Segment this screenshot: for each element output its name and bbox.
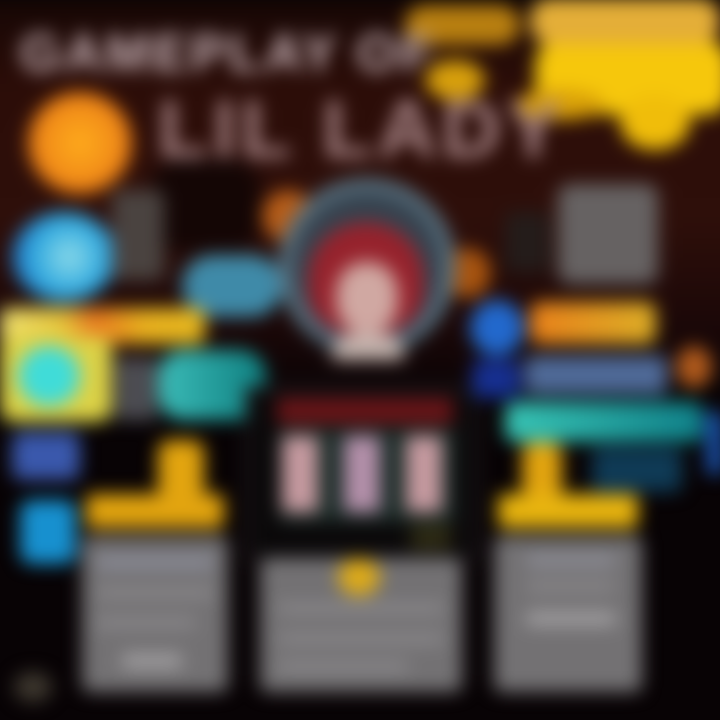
right banner <box>530 302 656 344</box>
reel two <box>344 436 380 512</box>
card: centre <box>260 558 462 692</box>
reel one <box>282 436 318 512</box>
reel three <box>406 436 442 512</box>
gold splash point <box>620 95 690 150</box>
card text <box>526 556 616 565</box>
icon: sun coin <box>28 92 132 194</box>
icon: orange dot <box>676 346 712 388</box>
icon: gold coin <box>338 558 380 596</box>
card text <box>278 634 444 643</box>
icon: small coin bottom left <box>14 672 52 702</box>
title line one: GAMEPLAY OF <box>20 24 436 83</box>
title <box>9 21 566 175</box>
right text band blue <box>525 356 667 394</box>
reel panel <box>279 428 455 522</box>
card: left <box>69 425 241 704</box>
card text <box>526 582 616 591</box>
card text <box>278 662 408 671</box>
icon: grey tile right <box>558 184 658 284</box>
card trophy <box>522 442 562 500</box>
icon: light blue blob <box>182 255 282 317</box>
card header <box>498 494 638 528</box>
right text band lower <box>592 448 682 492</box>
icon: blue orb <box>12 212 116 302</box>
card text <box>122 654 182 668</box>
card text <box>96 618 196 627</box>
icon: blue edge <box>706 412 720 474</box>
left banner <box>0 308 205 344</box>
portrait inner <box>292 192 442 342</box>
card body <box>494 536 642 692</box>
card header <box>86 494 224 528</box>
slot base <box>411 524 451 550</box>
icon: teal blob <box>158 350 266 420</box>
card: right <box>481 427 654 704</box>
icon: yellow and cyan badge <box>0 336 112 422</box>
card text <box>96 558 214 567</box>
card text <box>526 612 616 625</box>
card body <box>82 536 228 692</box>
portrait of Lil Lady <box>266 166 468 374</box>
icon: dark tile <box>505 212 550 272</box>
icon: deep blue block <box>472 360 520 398</box>
gold splash lower left <box>425 60 485 100</box>
gold splash flare <box>515 90 605 120</box>
card trophy <box>158 440 204 500</box>
icon: blue orb right <box>470 300 524 356</box>
icon: orange glow right <box>445 248 491 298</box>
icon: cyan tile <box>20 500 76 564</box>
background dark patch <box>150 160 260 250</box>
icon: blue tile <box>12 432 80 480</box>
title line two: LIL LADY <box>158 84 565 175</box>
portrait ring <box>278 178 456 356</box>
grey strip <box>115 358 157 420</box>
card text <box>96 588 214 597</box>
slot machine <box>245 386 479 562</box>
gold splash crown right <box>530 0 720 44</box>
hair <box>308 222 424 334</box>
card text <box>278 604 444 613</box>
icon: grey tile left <box>112 190 164 280</box>
gold splash body <box>535 40 720 115</box>
background glow <box>0 0 720 400</box>
icon: orange glow <box>262 190 314 242</box>
face <box>336 262 398 334</box>
badge centre <box>18 346 80 406</box>
right text band teal <box>505 402 703 442</box>
shoulders <box>332 334 404 360</box>
gold splash crown left <box>405 5 520 45</box>
gold splash: top right <box>392 0 720 164</box>
slot header <box>277 398 453 424</box>
